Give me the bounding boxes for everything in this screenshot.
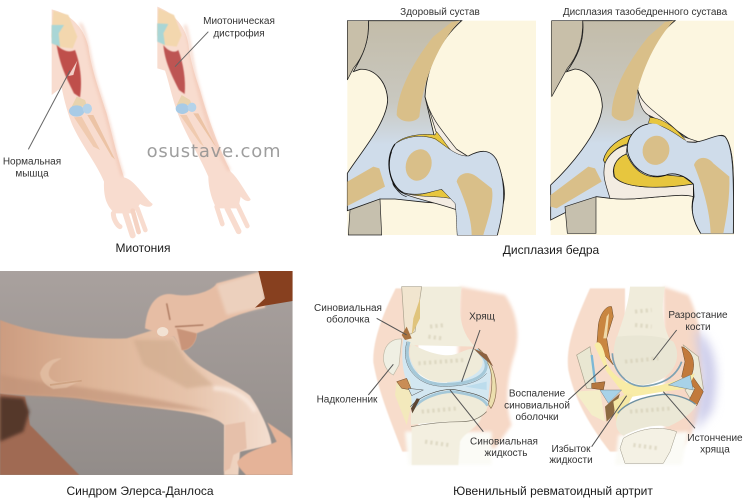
- femur cartilage: [407, 342, 486, 384]
- leader line: normal muscle: [28, 71, 70, 149]
- label: excess fluid: жидкости: [549, 455, 593, 466]
- label: synovial membrane: оболочка: [326, 314, 370, 326]
- bottom-left shoulder: [0, 393, 79, 475]
- label: normal muscle: мышца: [15, 168, 49, 180]
- diagram: healthy hip: [347, 21, 536, 235]
- caption: Ehlers-Danlos syndrome: Синдром Элерса-Данлоса: [66, 484, 214, 498]
- label: synovial fluid: Синовиальная: [470, 436, 538, 448]
- top hand: [145, 272, 265, 350]
- diagram: dysplastic hip: [551, 21, 734, 235]
- femur cartilage: [612, 353, 682, 386]
- label: cartilage thinning: хряща: [700, 444, 730, 456]
- panel: hip dysplasia: [347, 6, 734, 257]
- label: bone growth: кости: [685, 322, 711, 333]
- label: synovial inflammation: синовиальной: [504, 400, 570, 412]
- label: synovial membrane: Синовиальная: [314, 303, 382, 314]
- illustration: two arms: [28, 7, 251, 235]
- label: myotonic dystrophy: Миотоническая: [203, 16, 275, 27]
- femur condyle: [410, 343, 483, 382]
- femur shaft: [617, 287, 670, 340]
- label: dysplasia joint: Дисплазия тазобедренного сустава: [563, 6, 728, 18]
- femur shaft: [405, 287, 475, 347]
- label: healthy joint: Здоровый сустав: [400, 7, 480, 18]
- caption: hip dysplasia: Дисплазия бедра: [503, 243, 600, 257]
- femur: [614, 335, 677, 385]
- blue fluid pockets: [600, 390, 622, 403]
- tibia: [411, 392, 488, 425]
- label: myotonic dystrophy: дистрофия: [213, 28, 265, 40]
- photo: stretched skin on arm: [0, 271, 293, 475]
- forearm: [0, 320, 272, 475]
- synovial fluid: [402, 338, 492, 408]
- patella: [383, 339, 402, 375]
- tibia: [616, 394, 697, 436]
- scar: [40, 358, 76, 389]
- label: synovial fluid: жидкость: [485, 448, 527, 459]
- skin: [373, 288, 418, 452]
- diagram: healthy knee: [368, 287, 517, 465]
- panel: juvenile rheumatoid arthritis: [314, 287, 743, 498]
- skin: [568, 288, 625, 452]
- label: bone growth: Разростание: [668, 310, 728, 321]
- label: synovial inflammation: оболочки: [515, 411, 559, 423]
- leader lines: [368, 318, 483, 432]
- sleeve: [255, 271, 293, 308]
- bottom hand: [237, 422, 293, 475]
- bone texture: [418, 325, 465, 445]
- watermark: osustave.com: [147, 141, 281, 162]
- diagram: arthritic knee: [568, 287, 716, 465]
- arm: dystrophy: [157, 7, 251, 231]
- label: cartilage: Хрящ: [469, 312, 495, 322]
- label: normal muscle: Нормальная: [3, 156, 61, 168]
- yellow fluid: [594, 342, 695, 398]
- caption: myotonia: Миотония: [116, 241, 170, 255]
- label: synovial inflammation: Воспаление: [509, 388, 566, 400]
- arm: normal muscle: [52, 9, 153, 235]
- label: cartilage thinning: Истончение: [687, 433, 743, 444]
- leader lines: [568, 330, 695, 447]
- caption: juvenile rheumatoid arthritis: Ювенильный ревматоидный артрит: [453, 484, 653, 498]
- leader line: dystrophy: [175, 32, 208, 67]
- panel: myotonia: [3, 7, 281, 255]
- bone texture: [625, 310, 672, 448]
- label: excess fluid: Избыток: [552, 443, 591, 455]
- panel: Ehlers-Danlos photo: [0, 271, 293, 498]
- label: patella: Надколенник: [317, 394, 378, 406]
- synovial inflammation: brown: [597, 306, 613, 365]
